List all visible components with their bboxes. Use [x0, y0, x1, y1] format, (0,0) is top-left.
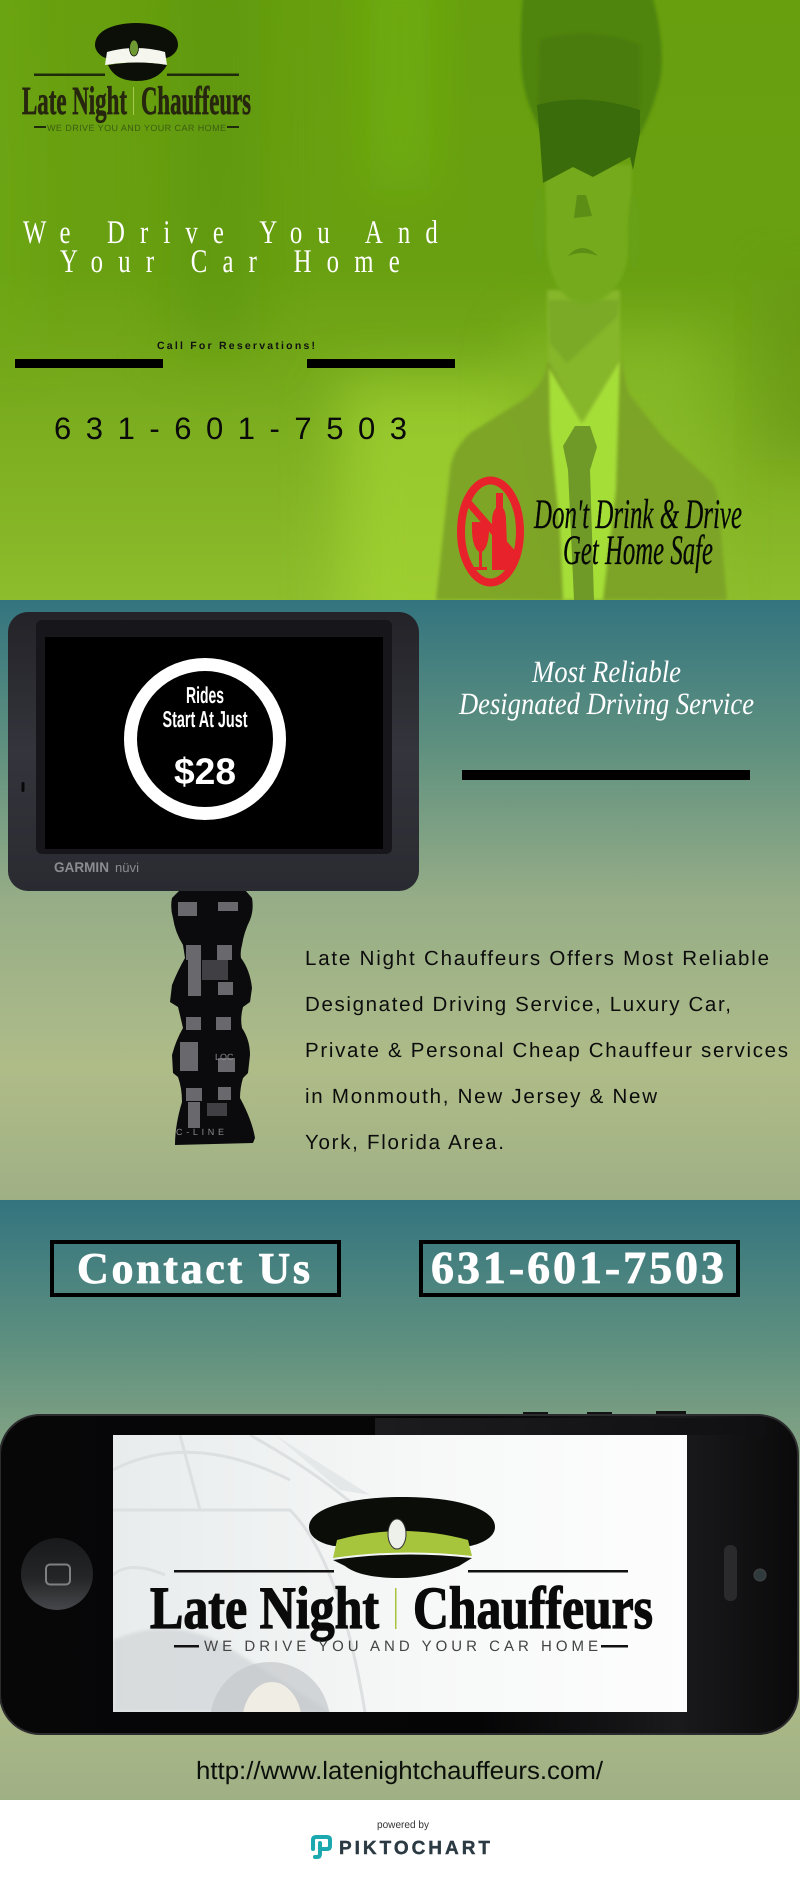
description: in Monmouth, New Jersey & New: [305, 1085, 657, 1108]
phone buttons: [523, 1411, 686, 1417]
logo rules: [34, 74, 239, 128]
screen logo cap: [309, 1497, 495, 1578]
icon: piktochart mark: [313, 1837, 330, 1857]
screen logo divider: [395, 1588, 396, 1629]
screen logo tagline: WE DRIVE YOU AND YOUR CAR HOME: [204, 1638, 598, 1655]
handle highlights: [178, 902, 238, 1128]
gps handle: [170, 890, 255, 1145]
handle embossed text: C-LINE: [176, 1127, 224, 1137]
logo divider: [133, 87, 134, 115]
camera: [754, 1569, 766, 1581]
handle embossed text: [176, 1052, 234, 1137]
description: York, Florida Area.: [305, 1131, 504, 1154]
handle embossed text: LOC: [215, 1052, 234, 1062]
phone body: [0, 1415, 798, 1734]
phone number: 631-601-7503: [54, 411, 407, 446]
logo wordmark: Chauffeurs: [141, 78, 251, 123]
hat peak and sunglasses: [537, 100, 640, 183]
chin shadow: [548, 300, 620, 363]
logo wordmark: Late Night: [22, 78, 127, 123]
price text: Rides: [186, 682, 224, 708]
call for reservations label: Call For Reservations!: [157, 340, 315, 352]
logo small: [22, 23, 251, 133]
gps brand: [54, 859, 139, 875]
screen logo wordmark: Chauffeurs: [413, 1575, 653, 1641]
screen logo wordmark: [150, 1575, 653, 1642]
neck: [547, 290, 620, 425]
footer background: [0, 1800, 800, 1880]
price text: Start At Just: [162, 706, 248, 732]
home button: [21, 1538, 93, 1610]
bar: [462, 770, 750, 780]
contact us button: Contact Us: [77, 1244, 310, 1293]
website url: http://www.latenightchauffeurs.com/: [196, 1757, 603, 1785]
cap: [95, 23, 178, 81]
logo wordmark: [22, 86, 251, 124]
description: [305, 947, 788, 1154]
hero background: [0, 0, 800, 650]
hat crown: [521, 0, 662, 135]
price text: $28: [174, 751, 236, 792]
logo tagline: WE DRIVE YOU AND YOUR CAR HOME: [47, 123, 226, 133]
icon: no drinking sign: [461, 480, 520, 582]
panel background: [0, 600, 800, 1200]
heading: We Drive You And: [23, 215, 438, 251]
service heading: Designated Driving Service: [458, 686, 754, 721]
screen logo wordmark: Late Night: [150, 1575, 379, 1642]
icon: gps device: [8, 612, 419, 1145]
face: [545, 165, 632, 304]
hat band: [541, 36, 637, 107]
footer: piktochart: [0, 1800, 800, 1880]
price text: [162, 682, 248, 792]
gps screen: [45, 637, 383, 849]
gps body: [8, 612, 419, 891]
shirt: [549, 360, 620, 600]
gps mic: [22, 782, 24, 792]
speaker: [724, 1545, 737, 1601]
price ring: [130, 664, 280, 814]
phone button: 631-601-7503: [431, 1242, 724, 1293]
gps brand: nüvi: [115, 860, 139, 875]
slogan: [533, 492, 742, 574]
service heading: Most Reliable: [531, 654, 681, 689]
description: Designated Driving Service, Luxury Car,: [305, 993, 731, 1016]
icon: smartphone: [0, 1411, 799, 1735]
heading: Your Car Home: [60, 244, 400, 280]
faint car image: [113, 1435, 370, 1712]
gps bezel: [36, 620, 392, 854]
jacket: [436, 360, 727, 600]
bar right: [307, 359, 455, 368]
tie: [563, 426, 597, 600]
panel background: [0, 1200, 800, 1800]
piktochart wordmark: PIKTOCHART: [339, 1838, 490, 1859]
powered by: powered by: [377, 1819, 430, 1831]
ears: [629, 196, 634, 254]
chauffeur figure: [436, 0, 727, 600]
heading: [23, 220, 438, 272]
service heading: [458, 654, 754, 721]
panel: reliable service: [0, 600, 800, 1200]
panel: green hero: [0, 0, 800, 650]
phone screen: [113, 1435, 687, 1712]
screen logo rules: [174, 1570, 628, 1648]
description: Late Night Chauffeurs Offers Most Reliable: [305, 947, 769, 970]
gps brand: GARMIN: [54, 859, 109, 875]
panel: contact: [0, 1200, 800, 1800]
bar left: [15, 359, 163, 368]
description: Private & Personal Cheap Chauffeur services: [305, 1039, 788, 1062]
facial shadows: [568, 195, 598, 256]
top reflection: [375, 1418, 765, 1435]
